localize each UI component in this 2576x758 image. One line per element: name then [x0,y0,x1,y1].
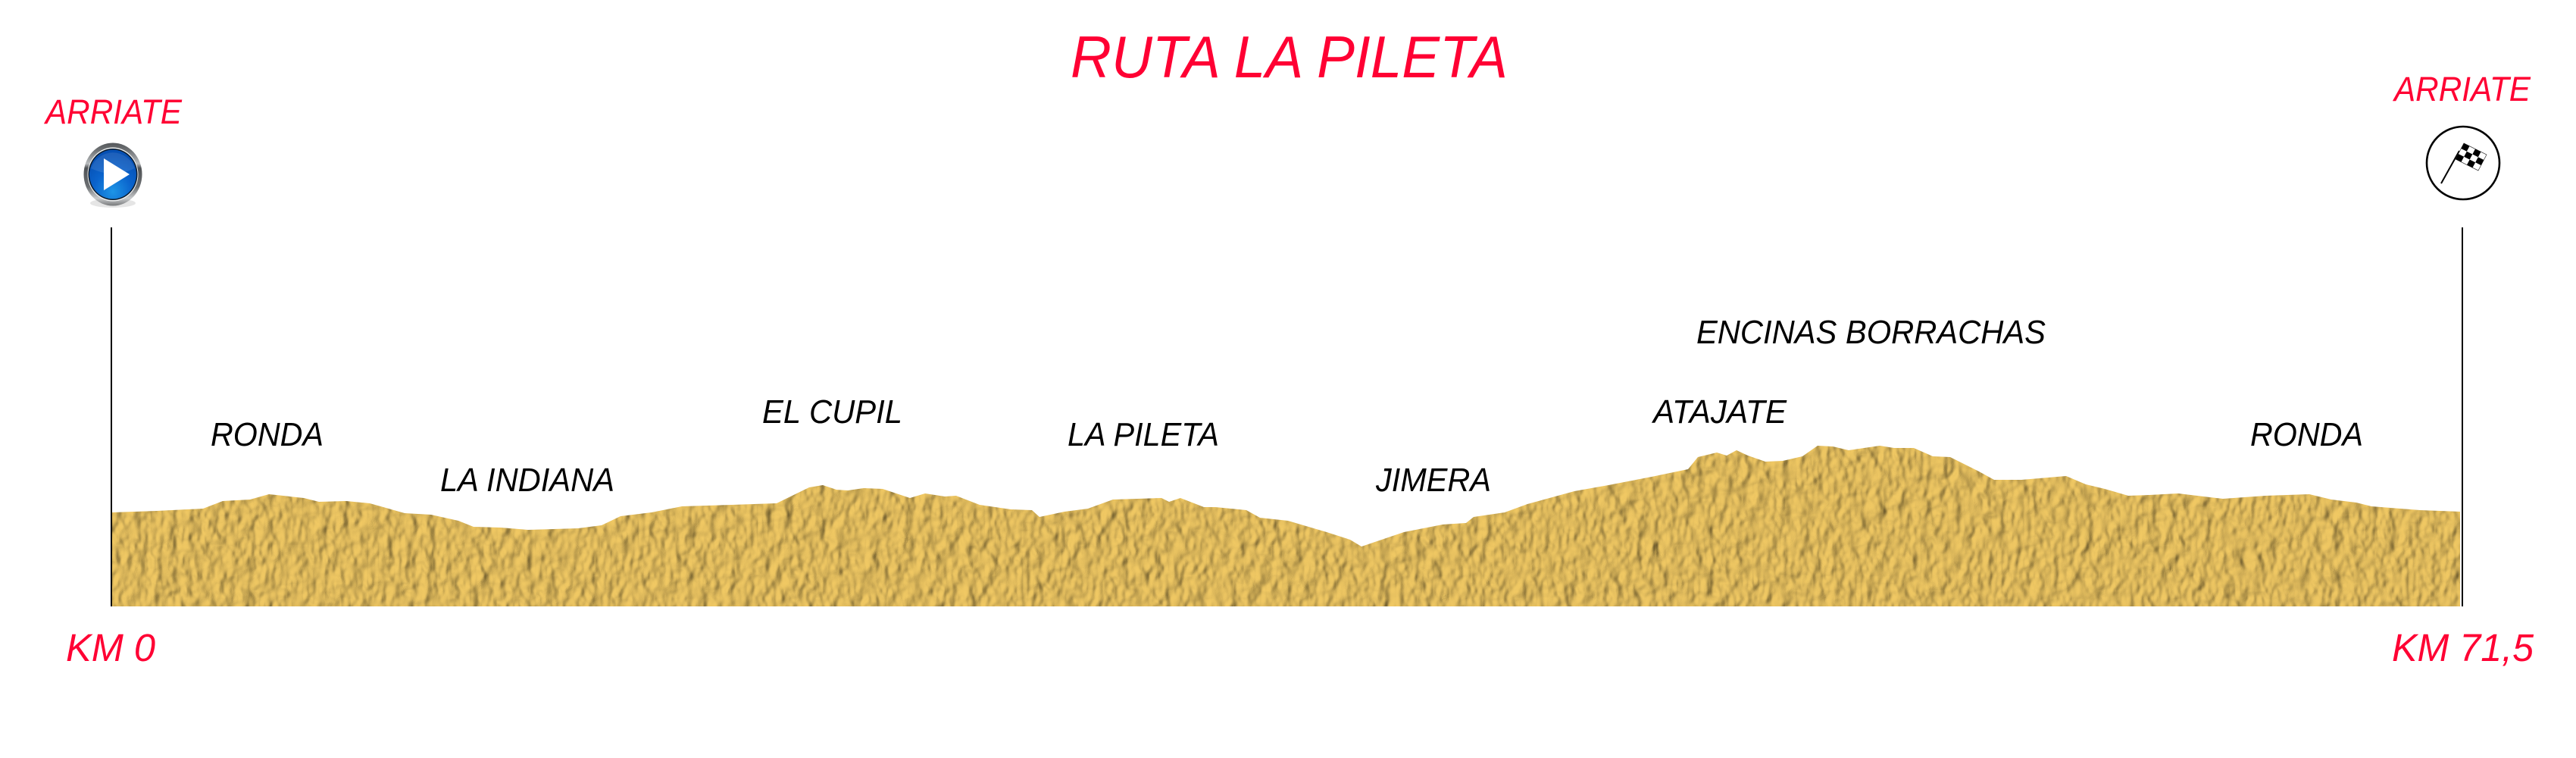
finish distance label: KM 71,5 [2392,626,2534,669]
icon: finish checkered flag [2427,127,2499,199]
elevation profile terrain [112,446,2460,606]
place label: Ronda start: RONDA [211,416,324,453]
finish vertical axis line [2462,227,2463,606]
place label: Ronda end: RONDA [2250,416,2363,453]
place label: Atajate: ATAJATE [1651,393,1787,431]
place label: La Pileta: LA PILETA [1068,416,1219,453]
finish town label: ARRIATE [2392,70,2531,108]
place label: La Indiana: LA INDIANA [440,462,614,499]
start town label: ARRIATE [43,92,183,131]
icon: start play button [83,143,142,208]
title: RUTA LA PILETA [1071,23,1508,90]
place label: Jimera: JIMERA [1375,462,1491,499]
place label: Encinas Borrachas: ENCINAS BORRACHAS [1696,314,2046,351]
start distance label: KM 0 [66,626,155,669]
start vertical axis line [111,227,112,606]
place label: El Cupil: EL CUPIL [762,393,902,431]
